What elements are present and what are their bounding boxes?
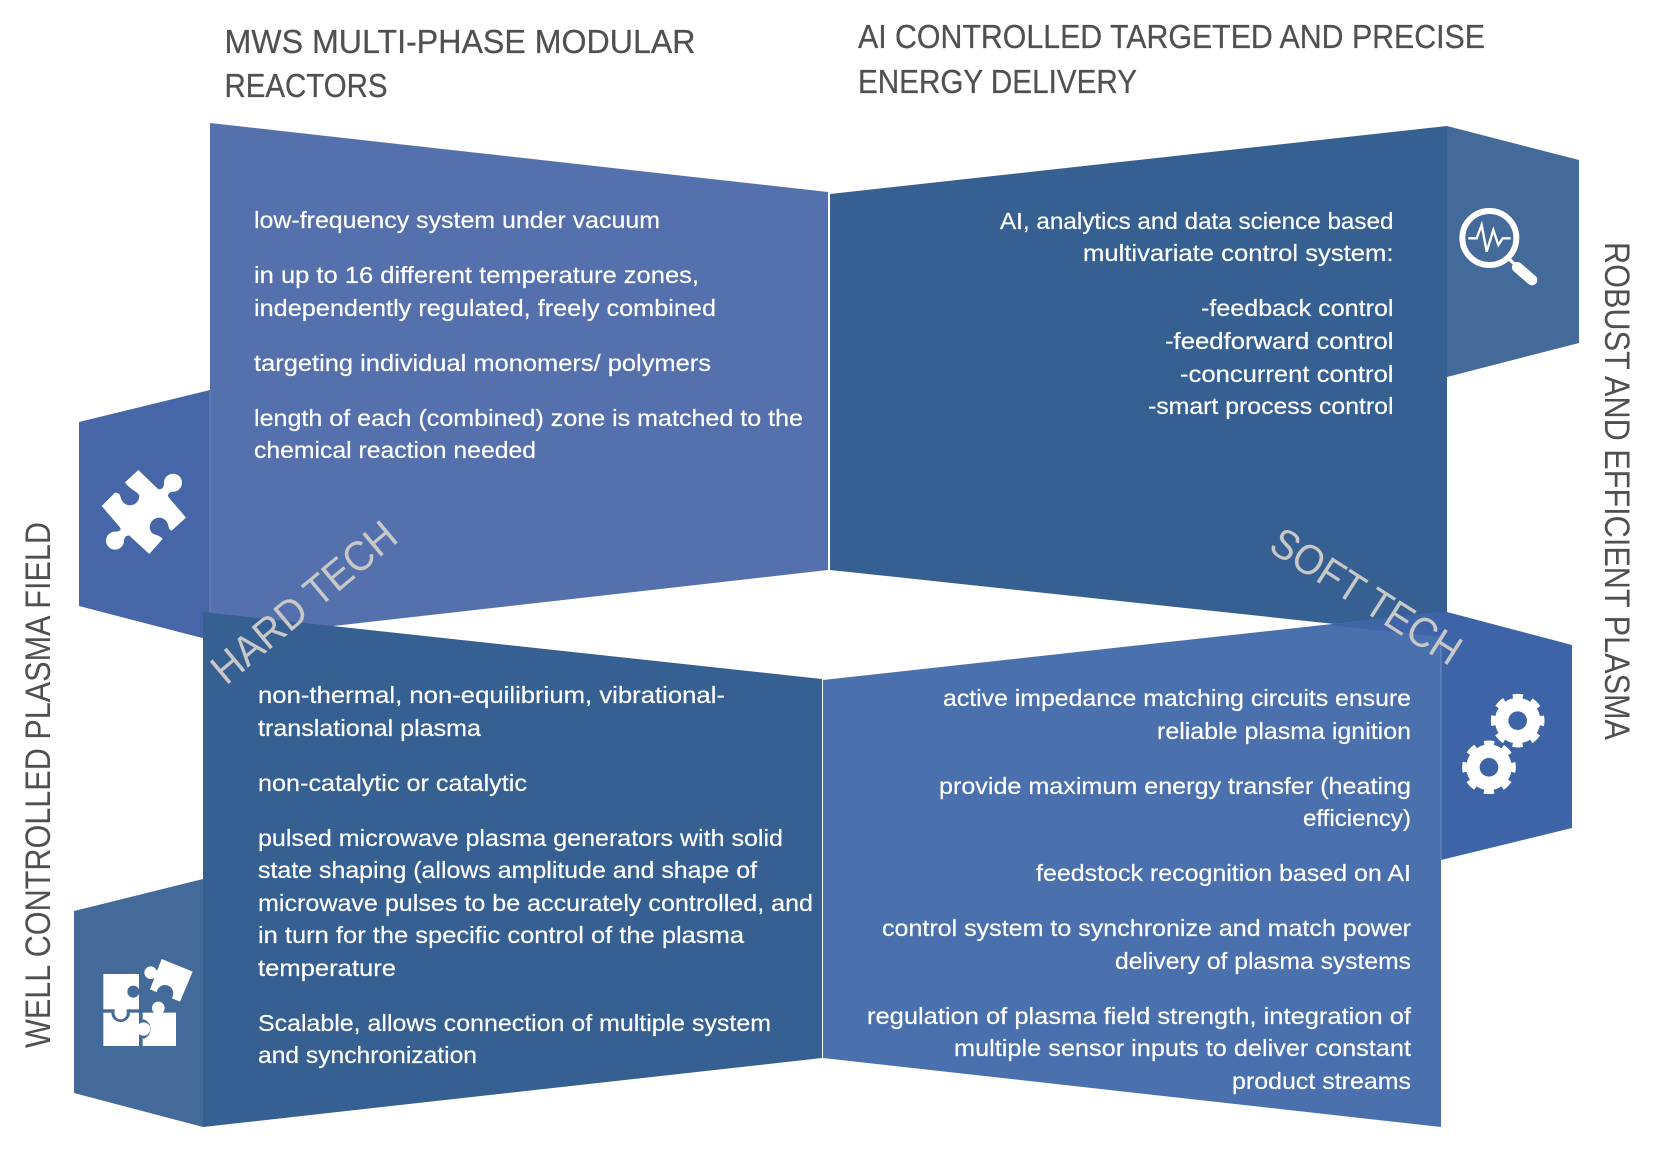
text block: plasma features: Scalable, allows connection of multiple system [258,1010,771,1036]
text block: control features [867,685,1412,1094]
tab: bottom-right side fold [1441,612,1572,860]
text block: control features: reliable plasma ignition [1157,718,1411,744]
text block: reactor features: low-frequency system under vacuum [254,207,660,233]
text block: multivariate control system: -feedback control [1201,295,1394,321]
heading: MWS multi-phase modular reactors [224,23,696,104]
text block: control features: regulation of plasma field strength, integration of [867,1003,1412,1029]
side label: robust and efficient plasma: ROBUST AND EFFICIENT PLASMA [1597,242,1636,741]
text block: multivariate control system: -concurrent control [1180,361,1394,387]
side label: well controlled plasma field: WELL CONTROLLED PLASMA FIELD [19,522,58,1048]
text block: multivariate control system: multivariate control system: [1083,240,1394,266]
text block: multivariate control system [1000,208,1394,419]
text block: control features: control system to synchronize and match power [882,915,1411,941]
icon: single puzzle piece [102,470,186,554]
text block: control features: active impedance matching circuits ensure [943,685,1411,711]
heading: MWS multi-phase modular reactors: MWS MULTI-PHASE MODULAR [224,23,696,60]
text block: plasma features: state shaping (allows amplitude and shape of [258,857,758,883]
heading: AI controlled targeted and precise energy delivery: AI CONTROLLED TARGETED AND PRECISE [858,18,1485,55]
text block: plasma features: translational plasma [258,715,481,741]
heading: AI controlled targeted and precise energy delivery: ENERGY DELIVERY [858,63,1137,100]
panel background: top-right [830,126,1447,636]
text block: plasma features: and synchronization [258,1042,477,1068]
text block: reactor features: length of each (combined) zone is matched to the [254,405,803,431]
tab: top-left side fold [79,390,210,640]
text block: plasma features: temperature [258,955,396,981]
text block: control features: delivery of plasma systems [1115,948,1411,974]
text block: reactor features [254,207,803,463]
panel: bottom-right impedance and power control [823,612,1572,1127]
text block: multivariate control system: -feedforward control [1165,328,1394,354]
label: SOFT TECH: SOFT TECH [1262,518,1470,674]
panel background: bottom-right [823,612,1441,1127]
heading: AI controlled targeted and precise energy delivery [858,18,1485,100]
panel: top-right soft tech AI control [830,126,1579,636]
text block: plasma features: microwave pulses to be accurately controlled, and [258,890,813,916]
tab: top-right side fold [1447,126,1579,377]
icon: two gears [1465,696,1542,792]
label: HARD TECH: HARD TECH [202,511,406,693]
text block: plasma features: pulsed microwave plasma generators with solid [258,825,783,851]
text block: control features: multiple sensor inputs to deliver constant [954,1035,1412,1061]
text block: plasma features: non-thermal, non-equilibrium, vibrational- [258,682,725,708]
panel: top-left hard tech reactors [79,123,828,640]
text block: control features: provide maximum energy transfer (heating [939,773,1411,799]
text block: control features: product streams [1232,1068,1411,1094]
text block: plasma features: in turn for the specific control of the plasma [258,922,744,948]
panel background: bottom-left [203,612,822,1127]
panel: bottom-left plasma field [74,612,822,1127]
text block: control features: feedstock recognition based on AI [1036,860,1411,886]
text block: multivariate control system: -smart process control [1148,393,1394,419]
tab: bottom-left side fold [74,879,203,1127]
text block: plasma features: non-catalytic or catalytic [258,770,527,796]
icon: assembled puzzle pieces [103,959,193,1046]
text block: reactor features: targeting individual monomers/ polymers [254,350,711,376]
text block: control features: efficiency) [1303,805,1411,831]
text block: plasma features [258,682,813,1068]
text block: reactor features: chemical reaction needed [254,437,536,463]
text block: reactor features: independently regulated, freely combined [254,295,716,321]
text block: reactor features: in up to 16 different temperature zones, [254,262,699,288]
text block: multivariate control system: AI, analytics and data science based [1000,208,1394,234]
heading: MWS multi-phase modular reactors: REACTORS [224,67,388,104]
panel background: top-left [210,123,828,640]
icon: magnifier with pulse [1462,211,1532,280]
